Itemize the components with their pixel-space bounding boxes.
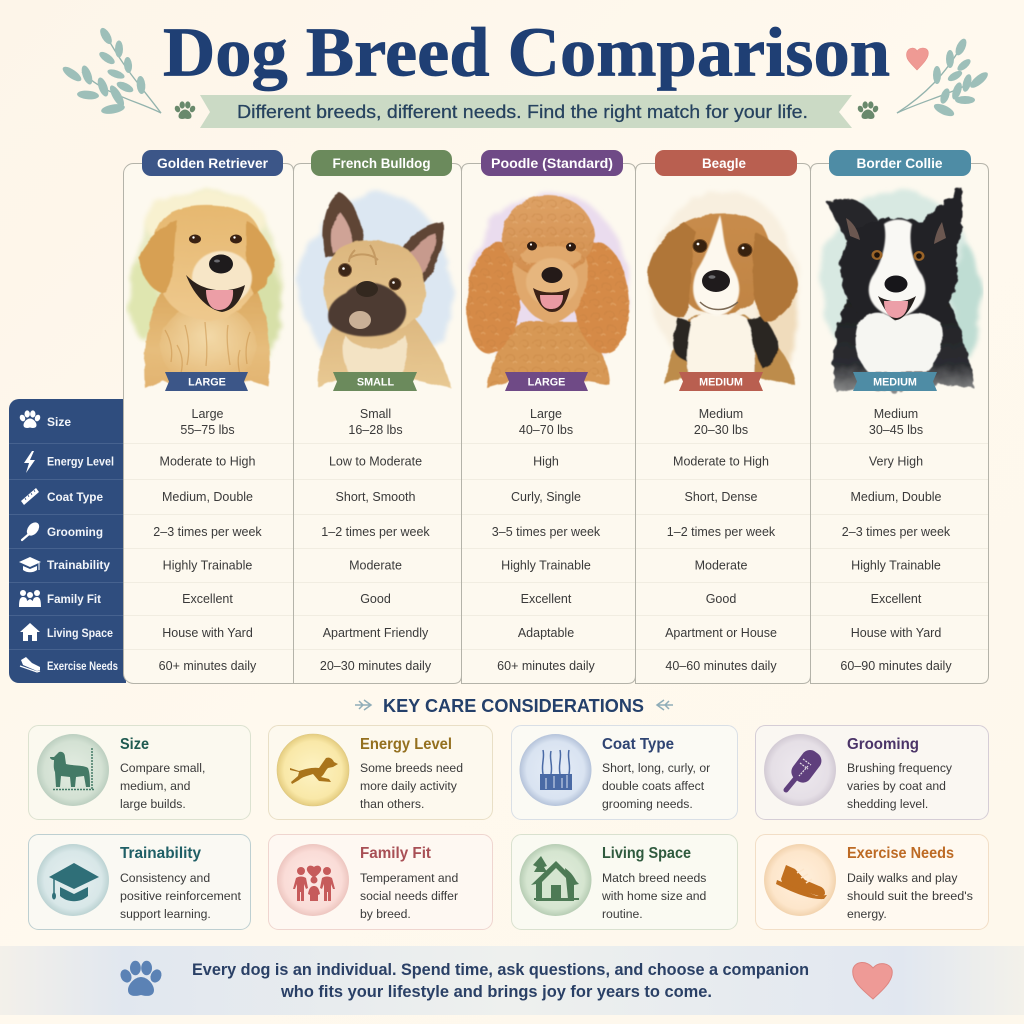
card: grooming: shedding level. bbox=[847, 797, 928, 811]
card: family fit: by breed. bbox=[360, 907, 411, 921]
card: coat type bbox=[512, 726, 738, 820]
title: Dog Breed Comparison bbox=[163, 14, 890, 92]
breed name pill bbox=[311, 150, 452, 176]
card: family fit bbox=[268, 834, 492, 930]
sidebar row: family fit: Family Fit bbox=[47, 592, 101, 606]
column values: Excellent bbox=[871, 592, 922, 606]
size ribbon: large bbox=[165, 372, 248, 391]
column values: House with Yard bbox=[162, 626, 253, 640]
column values: Apartment Friendly bbox=[323, 626, 429, 640]
column values: Low to Moderate bbox=[329, 454, 422, 468]
column values: Large bbox=[530, 407, 562, 421]
sidebar row: size bbox=[19, 410, 71, 429]
icon: left paw bbox=[174, 101, 196, 119]
column values: 60+ minutes daily bbox=[497, 659, 596, 673]
column values: Excellent bbox=[182, 592, 233, 606]
breed name pill: French Bulldog bbox=[332, 156, 430, 171]
column values: 2–3 times per week bbox=[842, 525, 951, 539]
breed name pill bbox=[655, 150, 797, 176]
column values: Medium, Double bbox=[162, 490, 253, 504]
column values: 60–90 minutes daily bbox=[840, 659, 952, 673]
column values: Medium, Double bbox=[850, 490, 942, 504]
column values: Moderate to High bbox=[160, 454, 255, 468]
column values: Large bbox=[192, 407, 224, 421]
column values: Good bbox=[360, 592, 391, 606]
icon: graduation cap bbox=[49, 863, 99, 901]
column values: Moderate bbox=[349, 558, 402, 572]
icon: sneaker bbox=[776, 865, 827, 899]
subtitle banner: Different breeds, different needs. Find the right match for your life. bbox=[237, 102, 808, 122]
card: exercise needs: should suit the breed's bbox=[847, 889, 973, 903]
column values: Short, Smooth bbox=[336, 490, 415, 504]
portrait: french bulldog bbox=[300, 193, 452, 388]
card: exercise needs: Daily walks and play bbox=[847, 871, 958, 885]
card: living space: Match breed needs bbox=[602, 871, 706, 885]
sidebar row: coat type: Coat Type bbox=[47, 490, 103, 504]
right leaf sprig decoration bbox=[897, 37, 990, 119]
column values: Good bbox=[706, 592, 736, 606]
card: trainability: positive reinforcement bbox=[120, 889, 242, 903]
sidebar row: energy level: Energy Level bbox=[47, 454, 114, 468]
card: energy level: Energy Level bbox=[360, 736, 452, 753]
sidebar row: coat type bbox=[21, 488, 103, 505]
card: family fit: social needs differ bbox=[360, 889, 458, 903]
column values: 40–70 lbs bbox=[519, 423, 573, 437]
card: living space: routine. bbox=[602, 907, 643, 921]
portrait: beagle bbox=[648, 191, 798, 388]
footer band bbox=[0, 946, 1024, 1015]
column values: House with Yard bbox=[851, 626, 941, 640]
column values: 20–30 lbs bbox=[694, 423, 748, 437]
column values: Very High bbox=[869, 454, 923, 468]
portrait: golden retriever bbox=[130, 190, 283, 388]
icon: blue paw bbox=[118, 961, 164, 996]
breed name pill: Beagle bbox=[702, 156, 746, 171]
breed name pill: Poodle (Standard) bbox=[491, 156, 613, 171]
section heading: key care considerations: KEY CARE CONSIDERATIONS bbox=[383, 695, 644, 716]
portrait: border collie bbox=[820, 187, 979, 392]
sidebar row: living space bbox=[20, 623, 113, 641]
card: exercise needs: energy. bbox=[847, 907, 887, 921]
size ribbon: small bbox=[333, 372, 417, 391]
portrait: standard poodle bbox=[461, 193, 635, 388]
icon: family with heart bbox=[293, 866, 335, 901]
card: energy level: than others. bbox=[360, 797, 424, 811]
column values: 20–30 minutes daily bbox=[320, 659, 432, 673]
column values: Highly Trainable bbox=[851, 558, 941, 572]
breed name pill bbox=[481, 150, 623, 176]
card: family fit: Family Fit bbox=[360, 845, 431, 862]
card: trainability: Trainability bbox=[120, 845, 201, 862]
sidebar row: energy level bbox=[24, 451, 114, 473]
column values bbox=[124, 407, 293, 673]
card: size: Compare small, bbox=[120, 761, 205, 775]
size ribbon: large: LARGE bbox=[188, 376, 226, 388]
card: grooming: varies by coat and bbox=[847, 779, 946, 793]
column values: High bbox=[533, 454, 559, 468]
column values: 30–45 lbs bbox=[869, 423, 923, 437]
size ribbon: medium: MEDIUM bbox=[699, 376, 743, 388]
card: energy level bbox=[268, 726, 492, 820]
icon: dog brush bbox=[786, 746, 825, 790]
column: beagle bbox=[636, 150, 810, 684]
column values bbox=[462, 407, 635, 673]
column values: Short, Dense bbox=[685, 490, 758, 504]
column: border collie bbox=[810, 150, 988, 684]
sidebar row: trainability: Trainability bbox=[47, 558, 110, 572]
icon: right paw bbox=[857, 101, 879, 119]
sidebar row: living space: Living Space bbox=[47, 626, 113, 640]
column values: 3–5 times per week bbox=[492, 525, 601, 539]
column values: 55–75 lbs bbox=[180, 423, 235, 437]
card: living space bbox=[512, 834, 738, 930]
card: trainability: support learning. bbox=[120, 907, 211, 921]
breed name pill bbox=[142, 150, 283, 176]
column values: Moderate bbox=[695, 558, 747, 572]
breed name pill: Border Collie bbox=[856, 156, 943, 171]
card: living space: with home size and bbox=[601, 889, 706, 903]
icon: pink heart bbox=[906, 48, 928, 70]
icon: running dog bbox=[290, 758, 338, 784]
card: trainability: Consistency and bbox=[120, 871, 210, 885]
sidebar row: grooming: Grooming bbox=[47, 525, 103, 539]
column values: Medium bbox=[699, 407, 743, 421]
card: size: large builds. bbox=[120, 797, 186, 811]
sidebar row: grooming bbox=[22, 520, 103, 540]
card: exercise needs bbox=[756, 834, 988, 930]
card: grooming bbox=[756, 726, 988, 820]
size ribbon: medium bbox=[853, 372, 937, 391]
size ribbon: large: LARGE bbox=[528, 376, 565, 388]
closing message: Every dog is an individual. Spend time, ask questions, and choose a companion bbox=[192, 960, 809, 979]
card: coat type: Short, long, curly, or bbox=[602, 761, 710, 775]
card: living space: Living Space bbox=[602, 845, 691, 862]
icon: coat hair layers bbox=[540, 750, 572, 790]
column values: Moderate to High bbox=[673, 454, 769, 468]
column values: Medium bbox=[874, 407, 918, 421]
card: size: Size bbox=[120, 736, 149, 753]
card: grooming: Grooming bbox=[847, 736, 919, 753]
icon: house with tree bbox=[531, 856, 579, 901]
subtitle banner bbox=[200, 95, 852, 128]
card: coat type: double coats affect bbox=[602, 779, 705, 793]
column values bbox=[636, 407, 810, 673]
breed name pill: Golden Retriever bbox=[157, 156, 269, 171]
column values: Apartment or House bbox=[665, 626, 777, 640]
size ribbon: small: SMALL bbox=[357, 376, 394, 388]
column: french bulldog bbox=[294, 150, 462, 684]
column values: 16–28 lbs bbox=[348, 423, 403, 437]
card: grooming: Brushing frequency bbox=[847, 761, 953, 775]
closing message: who fits your lifestyle and brings joy for years to come. bbox=[280, 982, 712, 1001]
icon: dog with measuring scale bbox=[50, 748, 94, 790]
column values bbox=[811, 407, 988, 673]
sidebar row: trainability bbox=[19, 557, 110, 572]
sidebar row: family fit bbox=[19, 590, 101, 607]
card: energy level: Some breeds need bbox=[360, 761, 463, 775]
column values: 40–60 minutes daily bbox=[665, 659, 777, 673]
column: golden retriever bbox=[124, 150, 294, 684]
sidebar row: size: Size bbox=[47, 415, 71, 429]
card: energy level: more daily activity bbox=[360, 779, 458, 793]
card: size: medium, and bbox=[120, 779, 190, 793]
column values: Curly, Single bbox=[511, 490, 581, 504]
attribute sidebar bbox=[9, 399, 126, 683]
icon: watercolor heart bbox=[853, 962, 892, 999]
left leaf sprig decoration bbox=[61, 26, 161, 116]
card: trainability bbox=[28, 834, 250, 930]
column values: 1–2 times per week bbox=[321, 525, 430, 539]
size ribbon: large bbox=[505, 372, 588, 391]
column values: Adaptable bbox=[518, 626, 574, 640]
column values: Highly Trainable bbox=[501, 558, 591, 572]
column values: Excellent bbox=[521, 592, 572, 606]
closing message bbox=[192, 960, 809, 1001]
card: coat type: Coat Type bbox=[602, 736, 674, 753]
column values: 60+ minutes daily bbox=[159, 659, 257, 673]
breed name pill bbox=[829, 150, 971, 176]
column values: 2–3 times per week bbox=[153, 525, 262, 539]
card: coat type: grooming needs. bbox=[602, 797, 693, 811]
card: exercise needs: Exercise Needs bbox=[847, 845, 954, 862]
column values bbox=[294, 407, 461, 673]
sidebar row: exercise needs: Exercise Needs bbox=[47, 659, 118, 673]
column: poodle bbox=[461, 150, 636, 684]
card: family fit: Temperament and bbox=[360, 871, 458, 885]
column values: 1–2 times per week bbox=[667, 525, 776, 539]
size ribbon: medium bbox=[679, 372, 763, 391]
column values: Small bbox=[360, 407, 391, 421]
card: size bbox=[28, 726, 250, 820]
column values: Highly Trainable bbox=[163, 558, 252, 572]
sidebar row: exercise needs bbox=[20, 657, 118, 673]
size ribbon: medium: MEDIUM bbox=[873, 376, 917, 388]
